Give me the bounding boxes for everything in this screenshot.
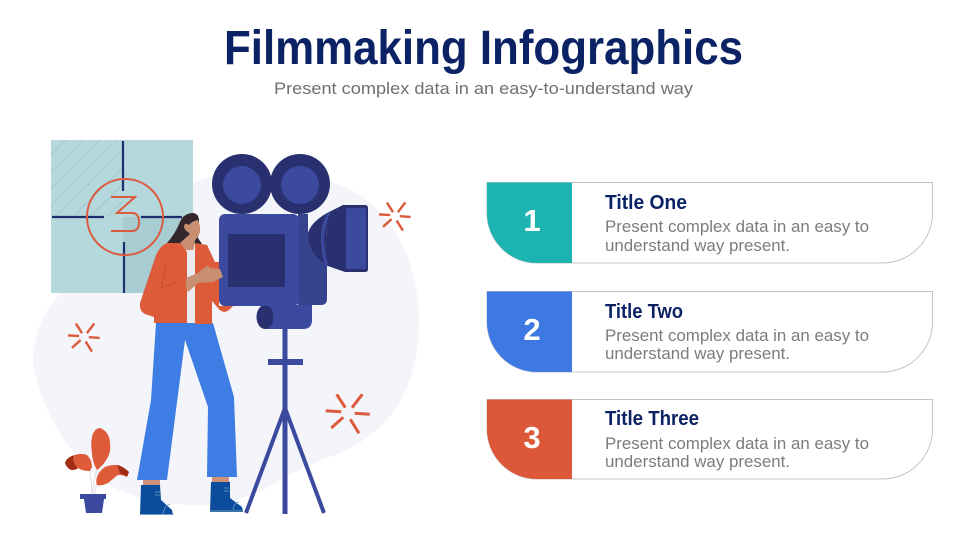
background blob <box>33 172 419 505</box>
card body <box>605 218 869 255</box>
ankles <box>143 477 229 486</box>
spark: top right <box>379 203 411 231</box>
jacket <box>140 243 233 324</box>
card outline <box>487 400 932 479</box>
number tab <box>487 292 572 372</box>
pot <box>80 494 106 513</box>
card outline <box>487 182 932 263</box>
card body: understand way present. <box>605 237 790 255</box>
camera mount <box>256 305 312 329</box>
left leaf <box>65 454 92 471</box>
countdown numeral <box>111 197 139 231</box>
lens <box>307 205 368 272</box>
title: Filmmaking Infographics <box>224 22 743 75</box>
card body: Present complex data in an easy to <box>605 435 869 453</box>
spark: left <box>68 324 100 352</box>
number tab <box>487 400 572 479</box>
card outline <box>487 292 932 372</box>
spark: lower right <box>326 394 370 433</box>
frame crosshair <box>52 141 182 293</box>
stems <box>90 470 100 494</box>
card body <box>605 327 869 363</box>
number: 1 <box>523 203 541 238</box>
illustration: potted plant <box>65 428 129 513</box>
subtitle: Present complex data in an easy-to-understand way <box>274 79 694 98</box>
neck and face <box>180 220 200 254</box>
card body <box>605 435 869 471</box>
card body: understand way present. <box>605 345 790 363</box>
countdown circle <box>87 179 163 255</box>
film reels <box>212 154 330 214</box>
illustration: camera operator <box>137 213 243 515</box>
hand on camera <box>186 265 223 292</box>
camera main body <box>219 214 299 306</box>
panel: title three <box>487 400 932 479</box>
white shirt <box>186 250 196 323</box>
camera side body <box>298 214 327 305</box>
panel: title two <box>487 292 932 372</box>
panel: title one <box>487 182 932 263</box>
trousers <box>137 323 237 480</box>
centre leaf <box>91 428 110 470</box>
number: 2 <box>523 312 541 347</box>
card body: understand way present. <box>605 453 790 471</box>
right boot <box>210 482 243 512</box>
illustration: countdown film frame <box>51 140 193 293</box>
hair <box>167 213 202 244</box>
tripod <box>246 325 324 514</box>
card body: Present complex data in an easy to <box>605 218 869 236</box>
shaded quadrant <box>123 217 193 293</box>
number: 3 <box>523 420 541 455</box>
camera screen <box>228 234 285 287</box>
card heading: Title Three <box>605 408 699 430</box>
card body: Present complex data in an easy to <box>605 327 869 345</box>
number tab <box>487 182 572 263</box>
illustration: film camera on tripod <box>212 154 368 514</box>
card heading: Title One <box>605 192 687 214</box>
right leaf <box>96 465 129 485</box>
hatched quadrant <box>51 140 123 217</box>
left boot <box>140 485 174 515</box>
card heading: Title Two <box>605 301 683 323</box>
